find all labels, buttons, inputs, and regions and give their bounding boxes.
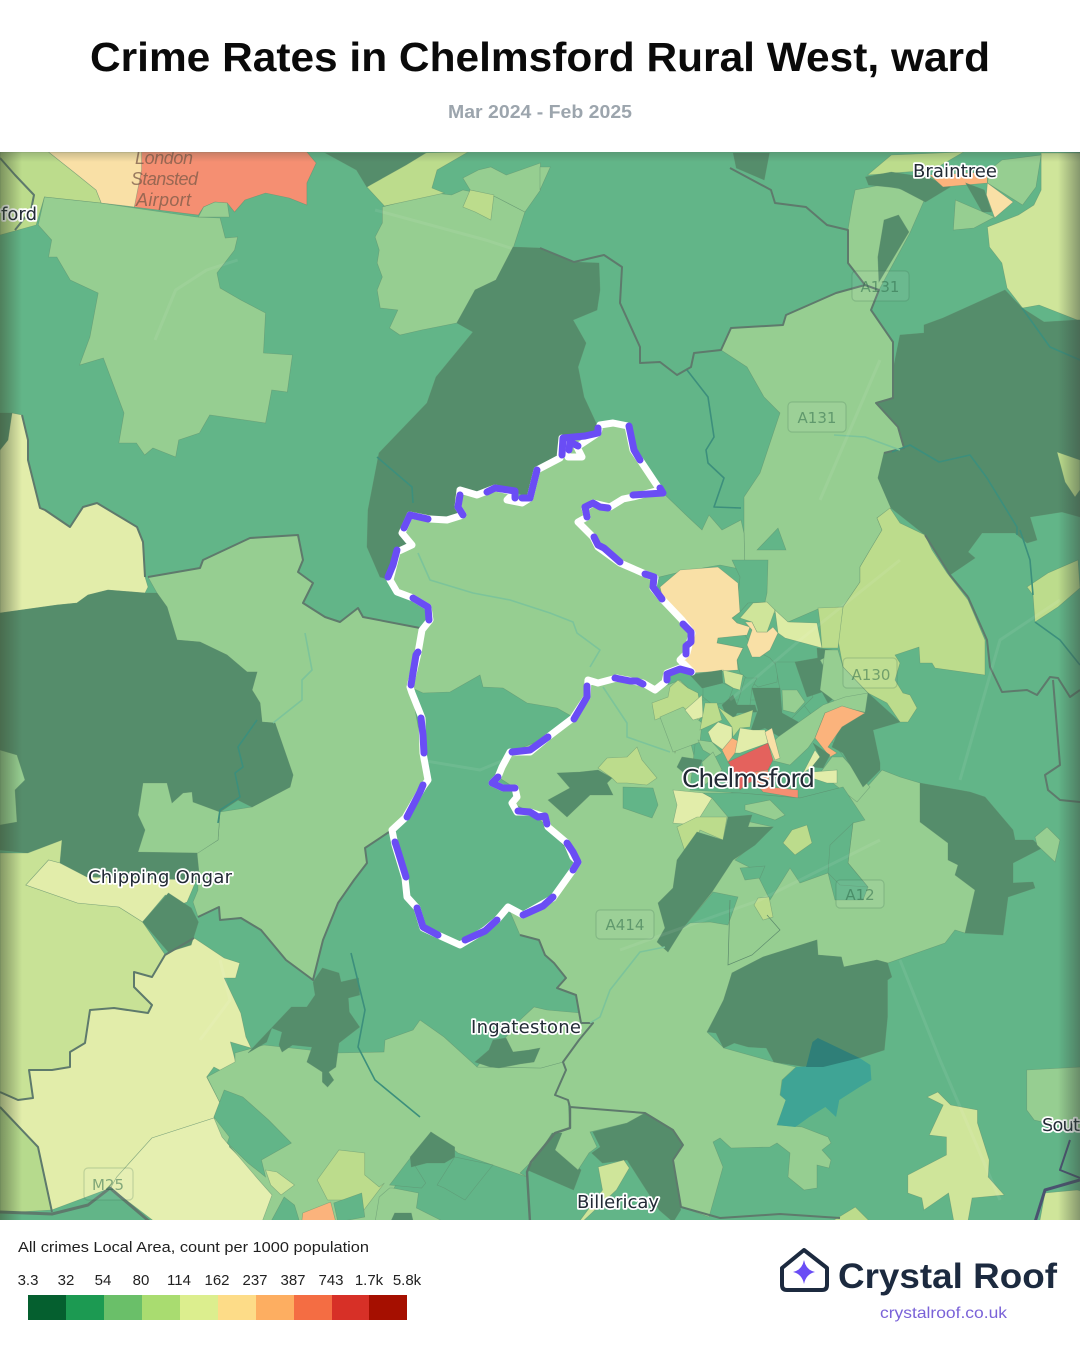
map region: dark patch south of Ingatestone — [475, 1038, 540, 1068]
legend values: 387 — [280, 1272, 306, 1289]
legend values: 54 — [95, 1272, 111, 1289]
map edge vignette — [0, 152, 1080, 1220]
map label: Stansted Airport: Stansted — [131, 169, 199, 189]
map region: east of ward to the A12 — [498, 678, 975, 1217]
road signs: A12 — [845, 886, 875, 904]
place labels: Ingatestone — [471, 1017, 581, 1038]
map: county and ward boundary lines — [0, 158, 1080, 1222]
map region: dark areas north-east — [876, 290, 1080, 575]
map label: Stansted Airport: London — [135, 148, 193, 168]
map region: Chelmsford urban mosaic — [652, 560, 900, 965]
legend values: 162 — [204, 1272, 230, 1289]
map region: A131 corridor and land east of the ward — [578, 285, 904, 622]
map region: Billericay light strip — [555, 1107, 645, 1170]
map region: west-central light district — [148, 535, 428, 980]
map label: Stansted Airport — [131, 148, 199, 210]
road signs: A131 — [798, 409, 836, 427]
legend values: 80 — [133, 1272, 149, 1289]
icon: house with star — [782, 1250, 827, 1290]
legend values: 743 — [318, 1272, 344, 1289]
map region: west dark district — [0, 590, 293, 882]
place labels: Chipping Ongar — [88, 867, 233, 888]
map region: south-west — [0, 840, 279, 1222]
legend values: 114 — [167, 1272, 191, 1289]
logo: Crystal Roof — [782, 1250, 1057, 1322]
legend values: 3.3 — [18, 1272, 38, 1289]
map region: dark cross south-west of Ingatestone — [248, 968, 360, 1087]
map region: west pale district — [0, 413, 148, 613]
road signs: A131 — [861, 278, 899, 296]
choropleth map — [0, 148, 1080, 1222]
website: crystalroof.co.uk — [880, 1305, 1008, 1322]
map region: light patches inside dark district — [0, 750, 220, 853]
place labels: Braintree — [913, 161, 997, 182]
legend values: 237 — [242, 1272, 268, 1289]
map regions: small wards west of Chelmsford — [548, 747, 658, 818]
map region: Ingatestone — [477, 1007, 593, 1068]
map regions: north-east and Braintree — [540, 152, 1080, 320]
map region: dark area north of the ward — [367, 247, 600, 580]
legend values: 1.7k — [355, 1272, 384, 1289]
ward boundary: Chelmsford Rural West — [388, 423, 692, 945]
subtitle: date range: Mar 2024 - Feb 2025 — [448, 102, 632, 122]
map regions: central-south and south-east — [527, 940, 1080, 1222]
legend title: All crimes Local Area, count per 1000 population — [18, 1239, 369, 1256]
brand name: Crystal Roof — [838, 1257, 1057, 1296]
legend — [18, 1239, 422, 1320]
legend values: 32 — [58, 1272, 74, 1289]
road signs: M25 — [92, 1176, 124, 1194]
road signs: A130 — [852, 666, 890, 684]
place labels — [1, 161, 1080, 1213]
place labels: Billericay — [577, 1192, 659, 1213]
place labels: Chelmsford — [682, 764, 815, 793]
map region: eastern patches — [838, 452, 1080, 935]
map region: west dark corner — [0, 413, 12, 450]
place labels: ford — [1, 204, 37, 225]
road signs — [84, 271, 909, 1200]
road signs: A414 — [606, 916, 644, 934]
map regions: north-west — [0, 152, 540, 457]
title: Crime Rates in Chelmsford Rural West, ward — [90, 34, 990, 80]
map region: south central — [207, 1020, 570, 1222]
legend values: 5.8k — [393, 1272, 422, 1289]
map label: Stansted Airport: Airport — [135, 190, 192, 210]
place labels: Sout — [1042, 1115, 1080, 1136]
map region: inner ward north (light) — [390, 423, 692, 717]
legend colour scale — [28, 1295, 407, 1320]
legend values — [18, 1272, 422, 1289]
map regions: southern small wards — [214, 1090, 493, 1222]
